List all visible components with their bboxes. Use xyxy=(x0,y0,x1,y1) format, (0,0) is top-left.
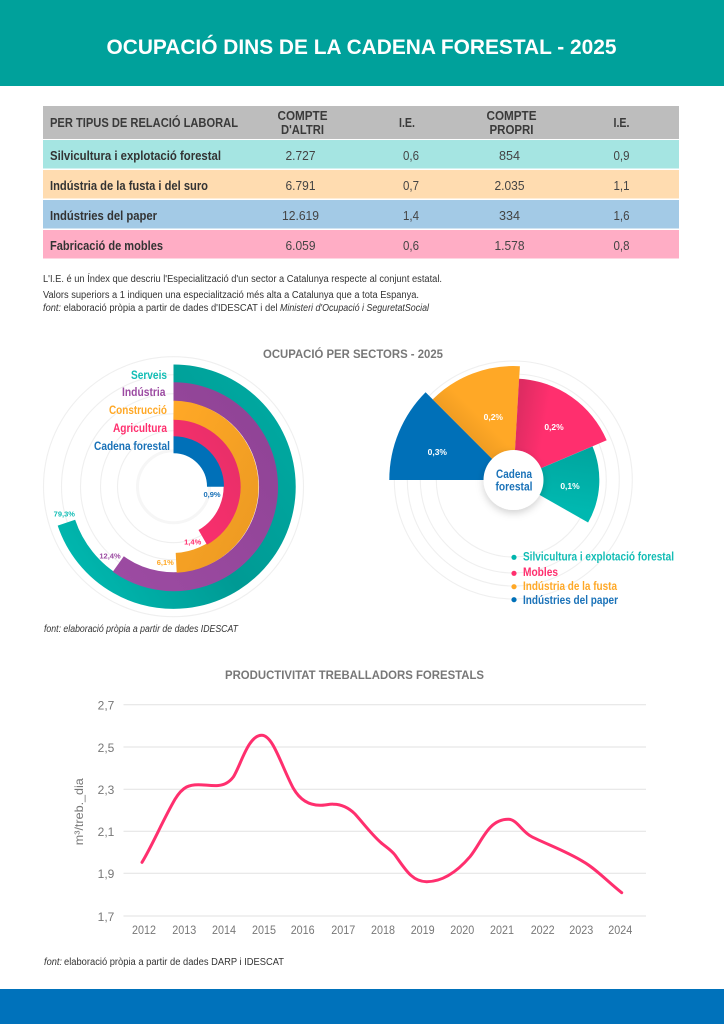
table row: mobles: 0,8 xyxy=(614,238,630,253)
y axis labels xyxy=(98,698,115,924)
x axis labels: 2017 xyxy=(331,925,355,937)
y axis labels: 2,5 xyxy=(98,741,115,755)
y axis labels: 1,7 xyxy=(98,910,115,924)
table row: mobles: 0,6 xyxy=(403,238,419,253)
table row: paper: Indústries del paper xyxy=(50,209,157,223)
table header: I.E. xyxy=(399,116,415,130)
ring labels: Construcció xyxy=(109,403,167,417)
table row: paper xyxy=(43,200,679,228)
table row: mobles: 6.059 xyxy=(286,238,316,253)
y axis labels: 1,9 xyxy=(98,867,115,881)
x axis labels xyxy=(132,925,633,937)
source: radial chart: font: elaboració pròpia a partir de dades IDESCAT xyxy=(44,624,239,635)
sector values: 0,2% xyxy=(484,412,503,422)
legend: Silvicultura i explotació forestal xyxy=(523,552,674,564)
table: per tipus de relació laboral xyxy=(43,106,679,258)
table header: PER TIPUS DE RELACIÓ LABORAL xyxy=(50,115,238,130)
x axis labels: 2023 xyxy=(569,925,593,937)
ring labels: Cadena forestal xyxy=(94,439,170,453)
ring: serveis xyxy=(66,374,287,600)
x axis labels: 2012 xyxy=(132,925,156,937)
notes on the table: elaboració pròpia a partir de dades d'IDESCAT i del xyxy=(64,303,278,314)
y axis labels: 2,1 xyxy=(98,825,115,839)
table row: silvicultura xyxy=(43,140,679,168)
x axis labels: 2013 xyxy=(172,925,196,937)
heading: ocupació per sectors: OCUPACIÓ PER SECTORS - 2025 xyxy=(263,346,443,361)
table row: mobles: 1.578 xyxy=(494,238,524,253)
sector: silvicultura xyxy=(513,446,599,522)
table header: PROPRI xyxy=(490,123,534,137)
title banner xyxy=(0,0,724,86)
value labels: 6,1% xyxy=(157,558,174,567)
table row: paper: 12.619 xyxy=(282,208,319,223)
value labels: 12,4% xyxy=(99,552,121,560)
table row: paper: 1,6 xyxy=(614,208,630,223)
legend: Indústries del paper xyxy=(523,595,618,607)
centre label xyxy=(484,450,544,510)
y axis labels: 2,7 xyxy=(98,698,115,712)
table row: paper: 334 xyxy=(499,208,520,223)
source: line chart: font: xyxy=(44,957,62,968)
legend: Indústria de la fusta xyxy=(523,581,618,593)
ring labels: Serveis xyxy=(131,368,167,382)
sector values: 0,2% xyxy=(544,422,564,432)
sector values: 0,1% xyxy=(560,481,580,491)
sector: indústria de la fusta xyxy=(433,366,520,480)
table row: silvicultura: Silvicultura i explotació forestal xyxy=(50,149,221,163)
table row: fusta i suro: 1,1 xyxy=(614,178,630,193)
ring: construcció xyxy=(174,410,249,563)
table header: I.E. xyxy=(614,116,630,130)
table row: fusta i suro: 2.035 xyxy=(494,178,524,193)
ring: agricultura xyxy=(174,428,232,537)
ring labels xyxy=(94,368,170,453)
x axis labels: 2015 xyxy=(252,925,276,937)
table row: silvicultura: 854 xyxy=(499,148,520,163)
table row: mobles: Fabricació de mobles xyxy=(50,239,163,253)
legend xyxy=(511,552,674,607)
centre label: forestal xyxy=(496,480,532,494)
line chart: productivitat xyxy=(72,698,646,937)
x axis labels: 2021 xyxy=(490,925,514,937)
x axis labels: 2022 xyxy=(531,925,555,937)
table header: D'ALTRI xyxy=(281,123,324,137)
radial bar chart: sectors xyxy=(44,357,304,617)
x axis labels: 2018 xyxy=(371,925,395,937)
table row: fusta i suro: Indústria de la fusta i del suro xyxy=(50,179,208,193)
x axis labels: 2016 xyxy=(291,925,315,937)
heading: productivitat: PRODUCTIVITAT TREBALLADORS FORESTALS xyxy=(225,668,484,682)
table header: COMPTE xyxy=(278,109,328,123)
notes on the table: Ministeri d'Ocupació i SeguretatSocial xyxy=(280,303,430,314)
value labels xyxy=(54,490,221,567)
table row: silvicultura: 2.727 xyxy=(286,148,316,163)
ring: indústria xyxy=(118,392,269,582)
value labels: 1,4% xyxy=(184,538,202,546)
ring labels: Agricultura xyxy=(113,421,167,435)
y axis title: m³/treb._dia xyxy=(72,778,86,845)
table header: COMPTE xyxy=(486,109,536,123)
table row: fusta i suro xyxy=(43,170,679,198)
sector: indústries del paper xyxy=(389,392,513,480)
y axis labels: 2,3 xyxy=(98,783,115,797)
notes on the table: L'I.E. é un Índex que descriu l'Especialització d'un sector a Catalunya respecte al conjunt estatal. xyxy=(43,272,442,285)
sector values: 0,3% xyxy=(428,447,447,457)
source: line chart: elaboració pròpia a partir de dades DARP i IDESCAT xyxy=(64,957,284,968)
sector values xyxy=(428,412,580,491)
ring labels: Indústria xyxy=(122,385,166,399)
notes on the table xyxy=(43,272,442,314)
table row: silvicultura: 0,6 xyxy=(403,148,419,163)
centre label: Cadena xyxy=(496,467,532,481)
value labels: 79,3% xyxy=(54,510,75,518)
table row: mobles xyxy=(43,230,679,258)
legend: Mobles xyxy=(523,567,558,579)
table row: paper: 1,4 xyxy=(403,208,419,223)
notes on the table: font: xyxy=(43,303,61,314)
title: OCUPACIÓ DINS DE LA CADENA FORESTAL - 2025 xyxy=(106,35,617,59)
productivity line xyxy=(142,735,622,893)
table row: silvicultura: 0,9 xyxy=(614,148,630,163)
table row: fusta i suro: 6.791 xyxy=(286,178,316,193)
x axis labels: 2024 xyxy=(608,925,633,937)
rose chart: cadena forestal xyxy=(389,361,674,607)
ring: cadena forestal xyxy=(174,445,216,487)
table header xyxy=(43,106,679,139)
x axis labels: 2014 xyxy=(212,925,237,937)
value labels: 0,9% xyxy=(203,490,221,499)
footer band xyxy=(0,989,724,1024)
sector: mobles xyxy=(513,379,607,480)
x axis labels: 2020 xyxy=(450,925,474,937)
x axis labels: 2019 xyxy=(411,925,435,937)
table row: fusta i suro: 0,7 xyxy=(403,178,419,193)
notes on the table: Valors superiors a 1 indiquen una especialització més alta a Catalunya que a tota Espanya. xyxy=(43,290,419,301)
